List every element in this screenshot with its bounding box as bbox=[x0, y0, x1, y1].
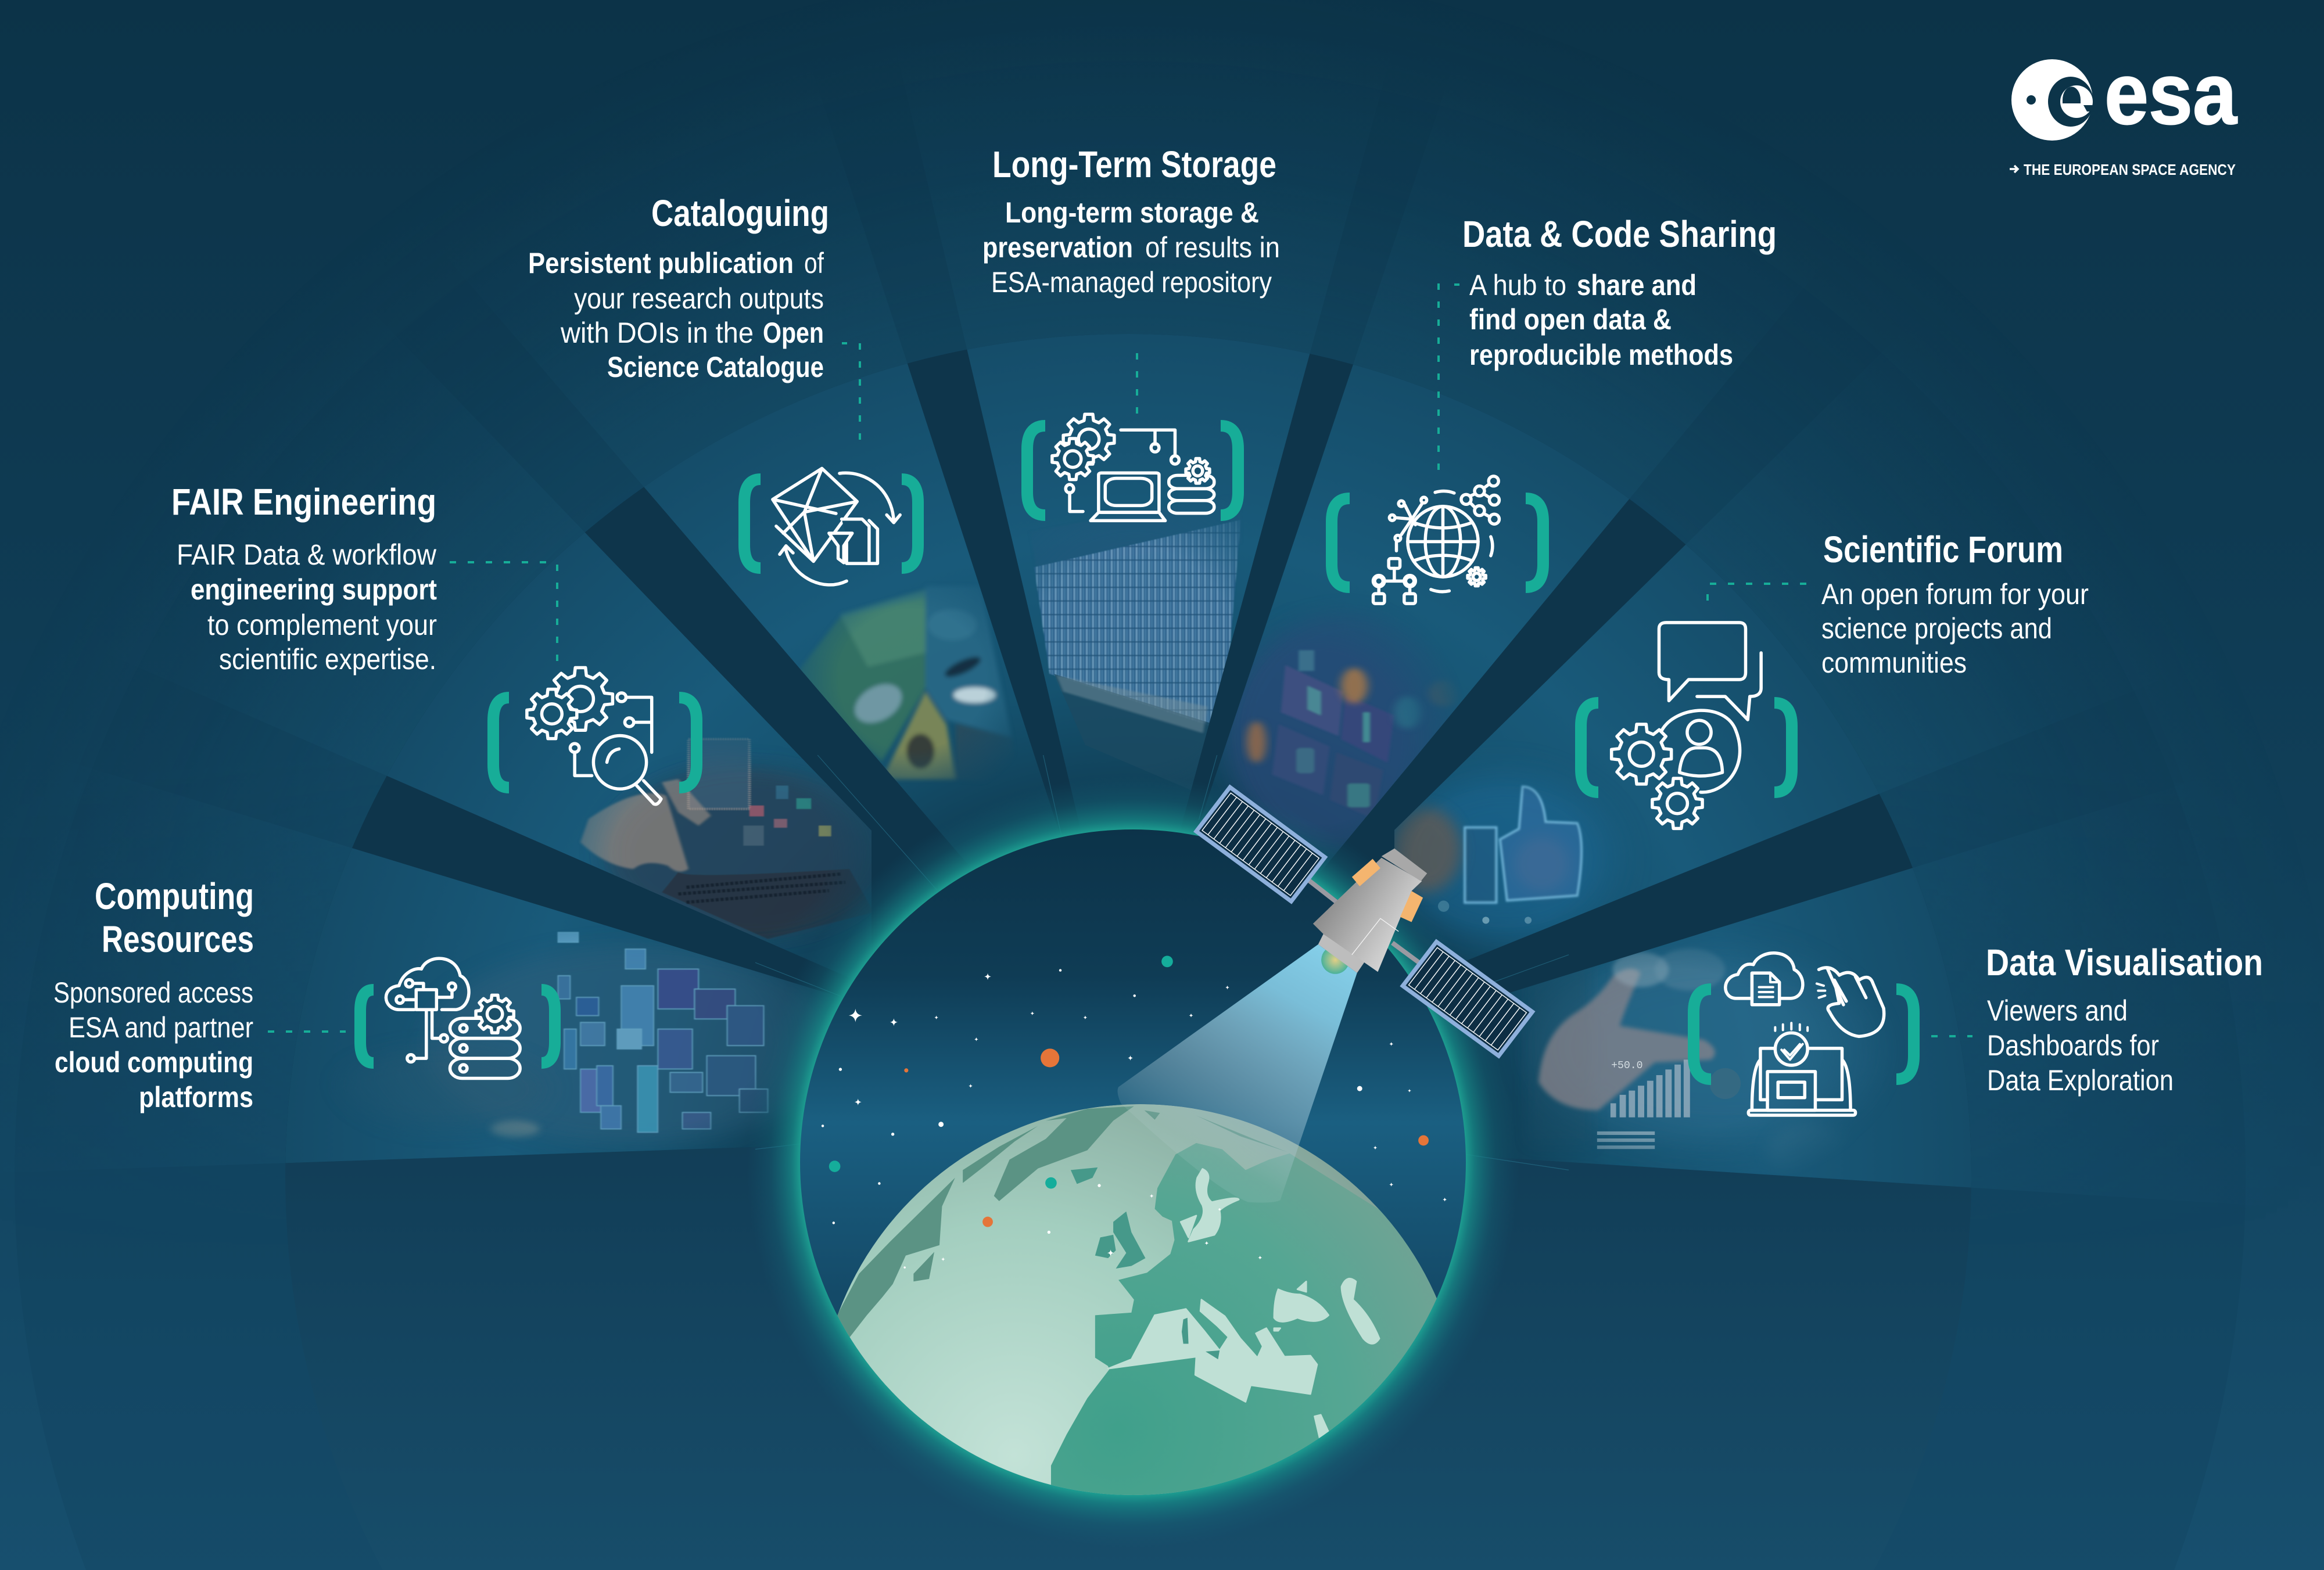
description bbox=[1821, 578, 2089, 679]
logo tagline: THE EUROPEAN SPACE AGENCY bbox=[2024, 161, 2236, 178]
icon bracket left bbox=[1581, 703, 1598, 792]
panel: data visualisation bbox=[1423, 741, 2324, 1210]
panel: data and code sharing bbox=[1183, 0, 2042, 871]
description: Sponsored access bbox=[53, 976, 253, 1009]
heading: FAIR Engineering bbox=[171, 481, 436, 523]
description bbox=[177, 538, 437, 676]
heading: Long-Term Storage bbox=[992, 143, 1276, 185]
satellite and beam bbox=[1118, 787, 1532, 1202]
photo: hand with dashboard: +50.0 bbox=[1611, 1060, 1643, 1072]
connector bbox=[842, 343, 860, 441]
halo around ring bbox=[273, 215, 1984, 885]
icon bracket left bbox=[360, 990, 374, 1063]
icon bracket right bbox=[1526, 498, 1543, 587]
stars and planets bbox=[822, 956, 1447, 1269]
description: platforms bbox=[139, 1081, 253, 1113]
sector wedge bbox=[226, 0, 1072, 871]
connector bbox=[1931, 1035, 1972, 1037]
icon: crystal, cycle arrows, document filter bbox=[773, 468, 900, 585]
heading: Data & Code Sharing bbox=[1462, 213, 1777, 255]
sector wedge bbox=[884, 0, 1406, 871]
hub hairlines bbox=[755, 755, 1569, 1170]
photo: circuit blocks bbox=[416, 932, 808, 1142]
icon bracket right bbox=[1221, 426, 1238, 515]
connector bbox=[1708, 584, 1808, 601]
logo arrow bbox=[2010, 166, 2018, 173]
icon: cloud document, touch, dashboard laptop bbox=[1726, 953, 1884, 1115]
main ring disc bbox=[285, 334, 1971, 1570]
description: A hub to bbox=[1469, 269, 1566, 301]
description: engineering support bbox=[191, 573, 437, 606]
heading: Cataloguing bbox=[651, 192, 829, 234]
logo: esa bbox=[2010, 45, 2237, 178]
dark bands between sectors bbox=[352, 350, 1913, 993]
description: of bbox=[804, 247, 824, 279]
description: cloud computing bbox=[55, 1046, 253, 1079]
description: An open forum for your bbox=[1821, 578, 2089, 610]
description: reproducible methods bbox=[1469, 339, 1733, 371]
description: ESA-managed repository bbox=[991, 266, 1272, 299]
logo wordmark: esa bbox=[2104, 45, 2237, 142]
hub glow bbox=[747, 776, 1519, 1549]
sector wedge bbox=[1183, 0, 2042, 871]
struts bbox=[1308, 879, 1421, 964]
heading: Data Visualisation bbox=[1986, 942, 2263, 983]
description bbox=[528, 247, 824, 383]
space disc bbox=[800, 829, 1466, 1495]
sector wedge bbox=[1423, 741, 2324, 1210]
icon bracket left bbox=[1027, 426, 1045, 515]
panel: cataloguing bbox=[226, 0, 1072, 871]
icon: chat bubbles, person, gears bbox=[1612, 623, 1761, 828]
photo: keyboard with locks bbox=[1223, 609, 1481, 858]
sector wedge bbox=[1394, 0, 2324, 990]
panel: fair engineering bbox=[173, 488, 871, 968]
logo mark bbox=[2011, 59, 2094, 141]
icon: gears, laptop, database bbox=[1052, 414, 1214, 520]
description: Long-term storage & bbox=[1005, 196, 1259, 229]
panel: scientific forum bbox=[1387, 0, 2324, 990]
faint rays outside ring bbox=[0, 0, 2324, 1210]
connector bbox=[1136, 353, 1138, 418]
solar panel left bbox=[1196, 787, 1325, 901]
description: science projects and bbox=[1821, 612, 2052, 645]
photo: earth observation collage bbox=[790, 586, 1019, 786]
description: your research outputs bbox=[574, 282, 824, 315]
satellite body bbox=[1313, 849, 1427, 973]
description: Science Catalogue bbox=[607, 351, 824, 383]
sector wedge bbox=[285, 848, 812, 1163]
description: Persistent publication bbox=[528, 247, 794, 279]
icon bracket right bbox=[1896, 989, 1914, 1079]
description: of results in bbox=[1145, 231, 1280, 264]
solar panel right bbox=[1403, 942, 1532, 1056]
connector bbox=[268, 1030, 346, 1033]
description bbox=[982, 196, 1280, 299]
description: preservation bbox=[982, 231, 1133, 264]
description: find open data & bbox=[1469, 303, 1672, 336]
panel: computing resources bbox=[55, 848, 821, 1163]
icon bracket right bbox=[902, 479, 918, 568]
icon: cloud and database bbox=[386, 958, 520, 1079]
heading: Resources bbox=[102, 918, 254, 960]
connector bbox=[450, 562, 557, 662]
icon bracket left bbox=[1332, 498, 1350, 587]
description bbox=[1469, 269, 1733, 371]
description: Viewers and bbox=[1987, 994, 2128, 1027]
sector wedge bbox=[0, 0, 871, 987]
instrument lens bbox=[1321, 946, 1349, 974]
panel: long-term storage bbox=[884, 0, 1406, 871]
photo: hand on laptop with chip bbox=[580, 739, 890, 939]
description: FAIR Data & workflow bbox=[177, 538, 437, 571]
icon bracket right bbox=[679, 698, 697, 788]
description: ESA and partner bbox=[69, 1011, 253, 1044]
icon bracket left bbox=[744, 479, 761, 568]
description: communities bbox=[1821, 646, 1967, 679]
description: scientific expertise. bbox=[219, 643, 436, 676]
heading: Scientific Forum bbox=[1823, 529, 2063, 570]
description: to complement your bbox=[207, 609, 437, 641]
icon bracket left bbox=[493, 698, 509, 788]
earth bbox=[817, 1104, 1482, 1570]
description: Dashboards for bbox=[1987, 1029, 2159, 1062]
icon bracket left bbox=[1694, 989, 1711, 1079]
description bbox=[53, 976, 253, 1113]
photo: server room bbox=[1030, 493, 1241, 792]
icon: gears and magnifier bbox=[527, 667, 661, 804]
description: with DOIs in the bbox=[560, 317, 754, 349]
icon bracket right bbox=[541, 990, 555, 1063]
heading bbox=[95, 875, 254, 960]
icon: globe network bbox=[1373, 476, 1499, 603]
heading: Computing bbox=[95, 875, 254, 917]
beam bbox=[1118, 944, 1357, 1202]
description: Open bbox=[763, 317, 824, 349]
photo: hand with dashboard bbox=[1528, 949, 1908, 1181]
photo: neon thumbs up bbox=[1387, 766, 1627, 949]
description: Data Exploration bbox=[1987, 1064, 2174, 1097]
description bbox=[1987, 994, 2174, 1097]
connector bbox=[1439, 283, 1459, 476]
description: share and bbox=[1577, 269, 1697, 301]
icon bracket right bbox=[1774, 703, 1792, 792]
